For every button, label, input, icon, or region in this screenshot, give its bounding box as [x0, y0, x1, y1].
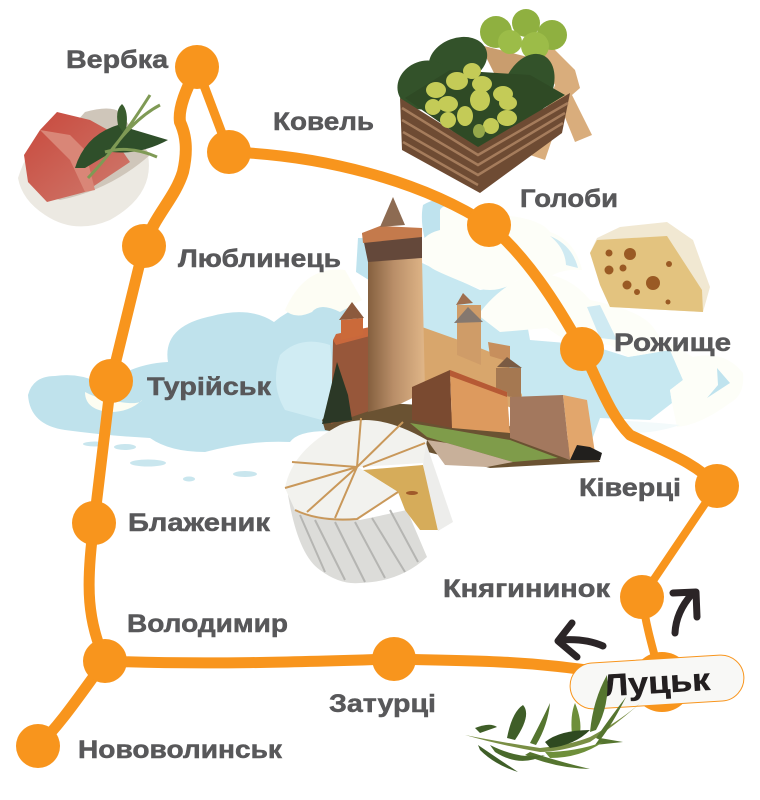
arrow: left: [558, 623, 603, 657]
illustration: clouds: [28, 200, 743, 482]
station labels: Нововолинськ: [78, 736, 283, 764]
avocados: [390, 29, 565, 131]
Lutsk label pill: [569, 654, 745, 710]
station labels: Блаженик: [128, 509, 271, 537]
station labels: Володимир: [127, 610, 288, 638]
station labels: Ковель: [273, 108, 374, 136]
illustration: rosemary sprig: [465, 675, 647, 772]
station labels: Рожище: [614, 329, 731, 357]
illustration: basket with fruit: [390, 9, 592, 193]
basket body: [405, 70, 565, 149]
grapes: [425, 63, 517, 138]
apples: [480, 9, 567, 60]
station labels: Затурці: [329, 690, 436, 718]
station labels: Люблинець: [178, 245, 341, 273]
illustration: swiss cheese: [590, 222, 710, 312]
station labels: Ківерці: [579, 474, 681, 502]
arrow: up-right: [673, 592, 697, 633]
illustration: castle: [322, 197, 602, 468]
herb on meat: [75, 95, 168, 178]
station labels: Голоби: [520, 185, 618, 213]
station labels: Вербка: [66, 46, 169, 74]
station labels: [66, 46, 731, 764]
illustration: camembert cheese: [285, 418, 453, 583]
route line: [38, 67, 717, 746]
station labels: Турійськ: [147, 373, 272, 401]
illustration: meat in bowl: [18, 95, 168, 226]
station labels: Княгининок: [443, 575, 611, 603]
Lutsk label pill: Луцьк: [602, 662, 712, 703]
